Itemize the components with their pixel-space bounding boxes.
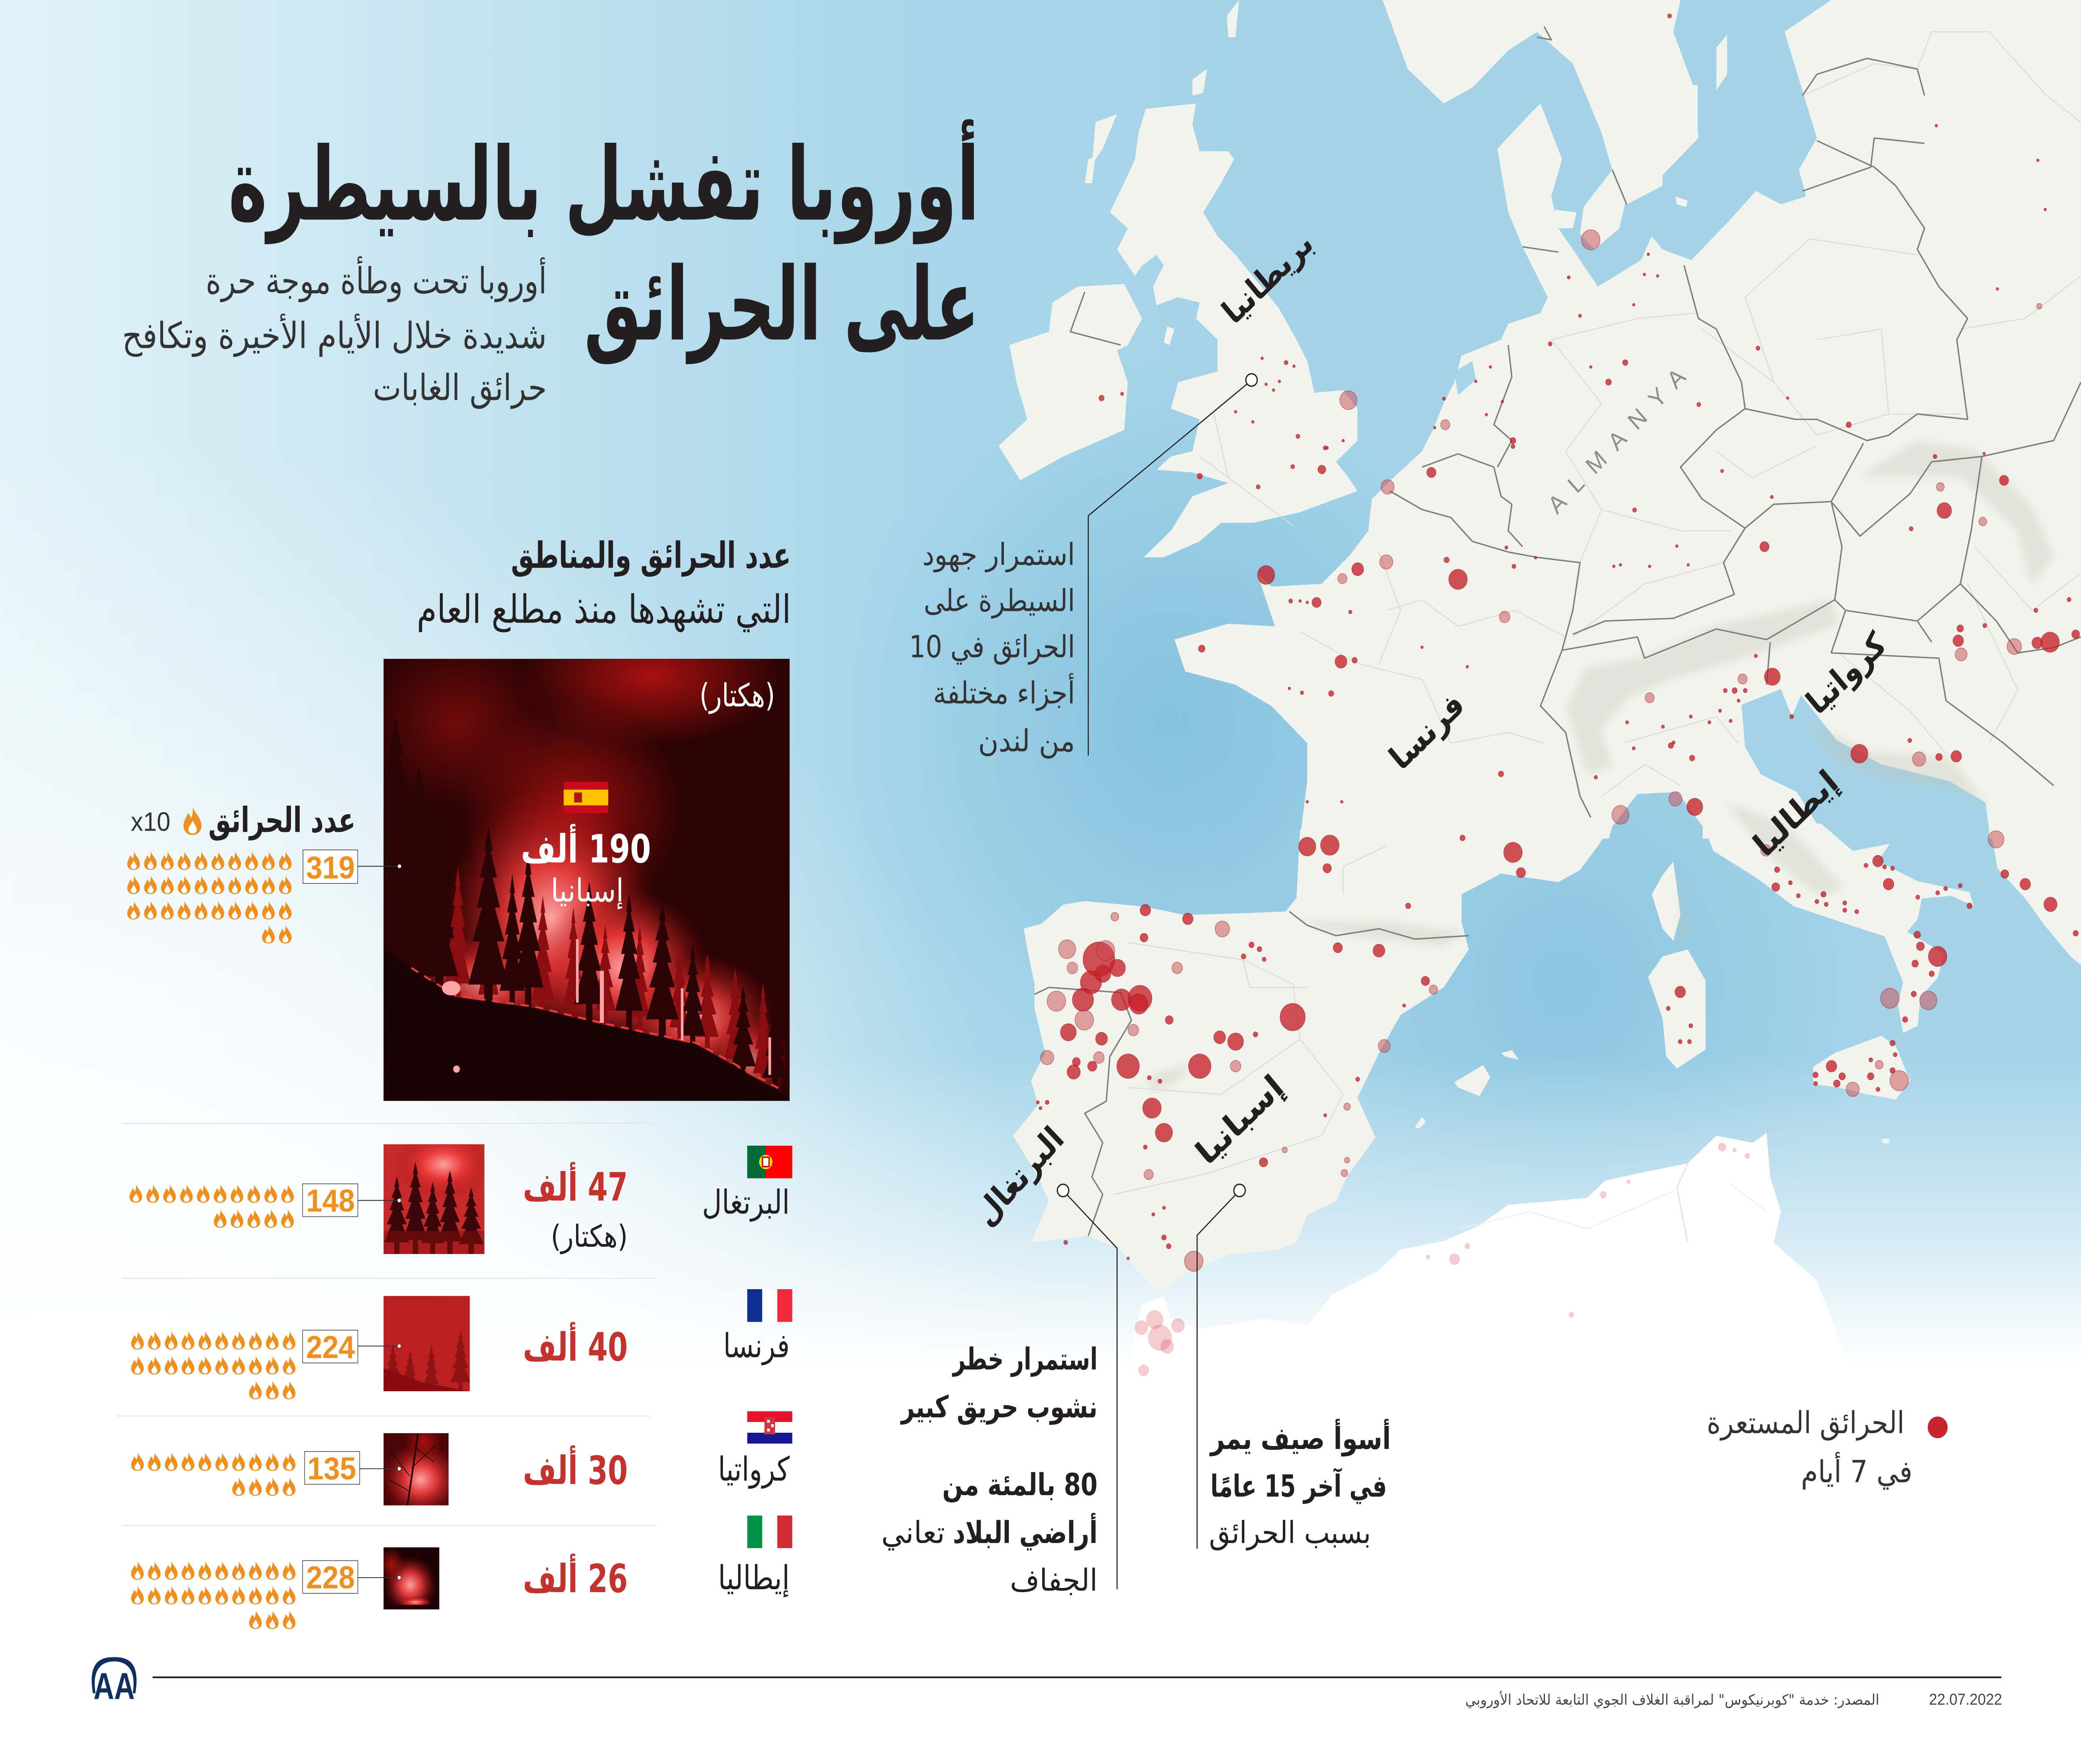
callout: Britain: السيطرة على	[924, 583, 1075, 618]
row: Croatia: كرواتيا	[718, 1450, 790, 1489]
photo: Croatia	[381, 1424, 461, 1517]
flames: France	[131, 1330, 296, 1399]
subtitle: حرائق الغابات	[373, 367, 547, 409]
count box: Portugal 148: 148	[306, 1183, 355, 1218]
fires: light dots	[1040, 230, 2042, 1271]
row: Italy	[131, 1516, 792, 1629]
foreground trees	[363, 717, 788, 1092]
row: Portugal: (هكتار)	[551, 1218, 628, 1254]
row: Croatia: 30 ألف	[523, 1445, 628, 1494]
legend: burning fires: الحرائق المستعرة	[1707, 1405, 1905, 1441]
hill	[384, 949, 790, 1101]
callout: Portugal: استمرار خطر	[952, 1342, 1098, 1377]
row: Croatia	[131, 1411, 792, 1517]
callout: Britain: الحرائق في 10	[909, 629, 1075, 665]
subtitle	[122, 256, 547, 409]
map: mountain shading	[1148, 441, 2054, 1092]
subtitle: أوروبا تحت وطأة موجة حرة	[206, 256, 547, 303]
row: Portugal: 47 ألف	[523, 1161, 628, 1210]
map: Iberia, France south, islands, North Africa	[1013, 829, 1910, 1373]
legend: fire count: x10	[131, 807, 170, 837]
callout: Portugal	[881, 1184, 1117, 1598]
chart heading	[417, 534, 791, 632]
source: المصدر: خدمة "كوبرنيكوس" لمراقبة الغلاف الجوي التابعة للاتحاد الأوروبي	[1465, 1691, 1879, 1708]
row: Portugal: البرتغال	[702, 1183, 790, 1222]
flames: Croatia	[131, 1452, 296, 1496]
legend: burning fires: في 7 أيام	[1801, 1452, 1912, 1490]
map labels: countries: بريطانيا	[1215, 224, 1320, 332]
callout: Portugal: نشوب حريق كبير	[900, 1389, 1098, 1424]
callout: Portugal: تعاني	[881, 1515, 945, 1551]
callout: Portugal: أراضي البلاد	[953, 1513, 1098, 1551]
map: southern Italy and Balkan coast	[1703, 821, 2081, 1033]
map labels: countries: كرواتيا	[1800, 625, 1893, 722]
row: Spain	[127, 607, 790, 1112]
map: Iberian borders	[1035, 911, 1688, 1243]
flag: France	[747, 1289, 792, 1322]
flag: Croatia	[747, 1411, 792, 1444]
flag: Italy	[747, 1516, 792, 1548]
title	[228, 119, 979, 364]
callout: Portugal: الجفاف	[1010, 1563, 1098, 1598]
legend: burning fires	[1707, 1405, 1948, 1490]
flames: Portugal	[129, 1184, 294, 1228]
title: أوروبا تفشل بالسيطرة	[228, 119, 979, 244]
chart heading: التي تشهدها منذ مطلع العام	[417, 587, 791, 632]
callout: Spain	[1197, 1184, 1391, 1551]
legend: fire count: عدد الحرائق	[209, 800, 356, 841]
logo: AA: AA	[94, 1666, 135, 1707]
title: على الحرائق	[584, 246, 979, 364]
fires: faint North Africa dots	[1135, 1143, 1750, 1376]
callout: Spain: في آخر 15 عامًا	[1210, 1468, 1387, 1504]
photo: Spain forest fire	[363, 607, 790, 1112]
background trees	[445, 867, 773, 1089]
flames: Spain	[127, 851, 292, 943]
count box: Spain 319: 319	[306, 850, 355, 885]
callout: Spain: أسوأ صيف يمر	[1209, 1419, 1391, 1456]
map: administrative boundaries	[1199, 32, 2081, 796]
map: northern land masses	[998, 0, 2081, 839]
photo: Portugal	[384, 1130, 494, 1254]
row: Italy: إيطاليا	[718, 1559, 790, 1598]
map labels: countries: إسبانيا	[1189, 1067, 1291, 1173]
count box: Italy 228: 228	[306, 1560, 355, 1595]
map of Europe	[968, 0, 2081, 1376]
fire streaks	[442, 939, 771, 1075]
flames: Italy	[131, 1561, 296, 1629]
callout: Britain: أجزاء مختلفة	[933, 673, 1075, 711]
callout: Britain: استمرار جهود	[922, 537, 1075, 572]
footer	[92, 1657, 2002, 1708]
map labels: countries: فرنسا	[1383, 685, 1471, 778]
callout: Portugal: 80 بالمئة من	[942, 1467, 1098, 1503]
map labels: countries: البرتغال	[968, 1119, 1071, 1233]
count box: Croatia 135: 135	[308, 1451, 356, 1486]
date: 22.07.2022	[1929, 1690, 2002, 1708]
callout: Britain: من لندن	[978, 723, 1075, 759]
map labels: countries: إيطاليا	[1747, 763, 1845, 865]
label: ALMANYA: ALMANYA	[1543, 363, 1691, 519]
row: Spain: إسبانيا	[551, 873, 624, 909]
map: national borders	[1070, 27, 2081, 817]
callout: Britain	[909, 374, 1257, 759]
callout: Spain: بسبب الحرائق	[1209, 1515, 1371, 1551]
flag: Spain	[564, 782, 608, 813]
count box: France 224: 224	[306, 1330, 355, 1365]
chart heading: عدد الحرائق والمناطق	[511, 534, 791, 577]
photo: France	[384, 1296, 471, 1391]
photo: Italy	[378, 1547, 439, 1614]
flag: Portugal	[747, 1146, 792, 1178]
map labels: countries	[968, 224, 1893, 1233]
legend: fire count	[131, 800, 356, 841]
row: Spain: 190 ألف	[521, 824, 651, 872]
map: Iberian regions	[1113, 846, 1767, 1229]
row: France: 40 ألف	[523, 1322, 628, 1370]
row: France	[131, 1289, 792, 1399]
row: Italy: 26 ألف	[523, 1553, 628, 1602]
fires: active fire dots	[1036, 14, 2080, 1376]
row: France: فرنسا	[723, 1327, 790, 1365]
row: Spain: (هكتار)	[699, 677, 775, 714]
subtitle: شديدة خلال الأيام الأخيرة وتكافح	[122, 313, 547, 357]
row: Portugal	[129, 1130, 792, 1254]
